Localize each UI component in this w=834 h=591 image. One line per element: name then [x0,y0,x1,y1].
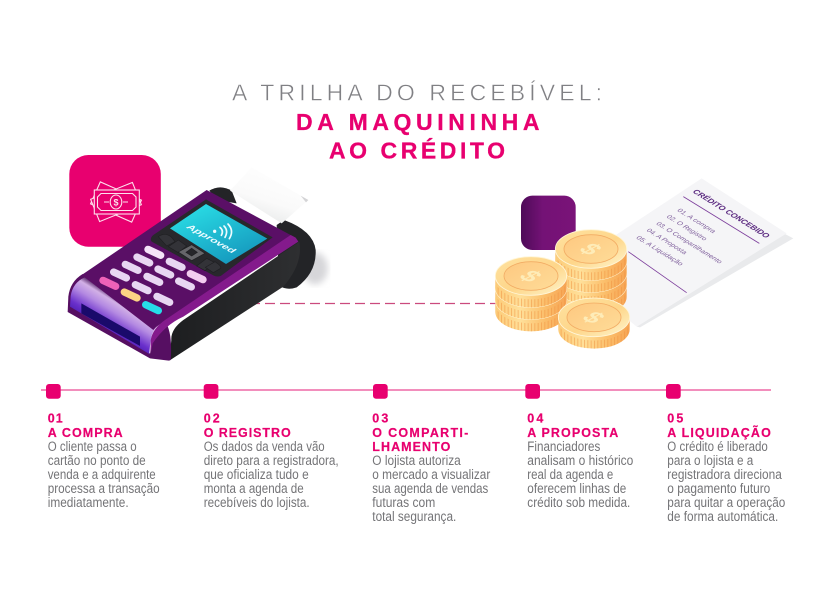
step 03: 03 [372,412,388,426]
step 04: analisam o histórico [527,453,633,468]
step 03: LHAMENTO [372,440,451,454]
step 05: registradora direciona [667,467,782,482]
step 03: o mercado a visualizar [372,467,491,482]
printer back bar [209,187,237,203]
receipt list: 01. A compra [675,208,717,235]
step 01: 01 [48,412,63,426]
step 01: venda e a adquirente [48,467,156,482]
step 05: A LIQUIDAÇÃO [667,425,771,440]
front lower shell [68,274,171,361]
title: DA MAQUININHA [296,109,540,135]
step 04: A PROPOSTA [527,426,618,440]
illustration: card machine [68,167,328,361]
step 05: o pagamento futuro [667,481,770,496]
icon: pink square with banknotes: $ [113,198,119,208]
dashed connector line [250,302,497,304]
black side panel [169,242,300,361]
coin: front [558,298,630,349]
step 04: crédito sob medida. [527,495,630,510]
step 01: cartão no ponto de [48,453,146,468]
step 01: imediatamente. [48,495,129,510]
contactless icon [214,224,232,239]
step 04 [527,412,633,510]
step 03: O lojista autoriza [372,453,461,468]
step 03: O COMPARTI- [372,426,468,440]
coin stack: back [555,230,627,316]
coin stack: left [495,257,567,331]
step 04: real da agenda e [527,467,613,482]
timeline [41,384,771,399]
step 05: 05 [667,412,683,426]
coin stack: left: $ [512,267,549,286]
title [232,80,602,163]
bright right rim [151,235,298,353]
screen label: Approved [184,223,239,255]
receipt sheet [580,178,787,327]
keypad soft buttons [158,234,221,273]
step 02: direto para a registradora, [204,453,339,468]
title: A TRILHA DO RECEBÍVEL: [232,80,602,106]
step 03 [372,412,491,524]
step 05: para o lojista e a [667,453,754,468]
lilac front panel [70,277,162,354]
title: AO CRÉDITO [329,136,505,163]
step 04: 04 [527,412,543,426]
coin stack: back: $ [572,240,609,259]
step 01: O cliente passa o [48,439,137,454]
coin: front: $ [575,309,612,327]
step 02 [204,412,339,510]
step 01 [48,412,160,510]
screen bezel [151,199,273,277]
step 05 [667,412,785,524]
receipt list [634,208,724,267]
step 05: para quitar a operação [667,495,785,510]
step 04: Financiadores [527,439,601,454]
illustration: receipt and coins [495,178,793,349]
step 02: monta a agenda de [204,481,304,496]
purple square [521,196,576,250]
receipt shadow [637,234,793,327]
receipt list: 04. A Proposta [644,228,689,256]
step 02: que oficializa tudo e [204,467,309,482]
rear roller [277,220,316,289]
icon: pink square with banknotes [69,155,161,247]
receipt list: 05. A Liquidação [634,235,685,267]
step 03: futuras com [372,495,435,510]
step 04: oferecem linhas de [527,481,626,496]
keypad [98,245,208,315]
top face [82,190,295,330]
step 02: Os dados da venda vão [204,439,325,454]
step 03: sua agenda de vendas [372,481,489,496]
front highlight [150,324,161,353]
step 01: processa a transação [48,481,160,496]
step 03: total segurança. [372,509,456,524]
receipt title: CRÉDITO CONCEBIDO [690,188,772,239]
receipt list: 02. O Registro [664,214,709,242]
paper slip [230,167,308,223]
card slot [81,303,140,346]
step 02: O REGISTRO [204,426,291,440]
receipt lines [628,197,759,293]
step 01: A COMPRA [48,426,123,440]
step 02: recebíveis do lojista. [204,495,310,510]
receipt list: 03. O Compartilhamento [654,221,724,265]
machine shadow [302,252,328,284]
step 02: 02 [204,412,220,426]
step 05: O crédito é liberado [667,439,768,454]
step 05: de forma automática. [667,509,778,524]
screen [170,204,267,264]
